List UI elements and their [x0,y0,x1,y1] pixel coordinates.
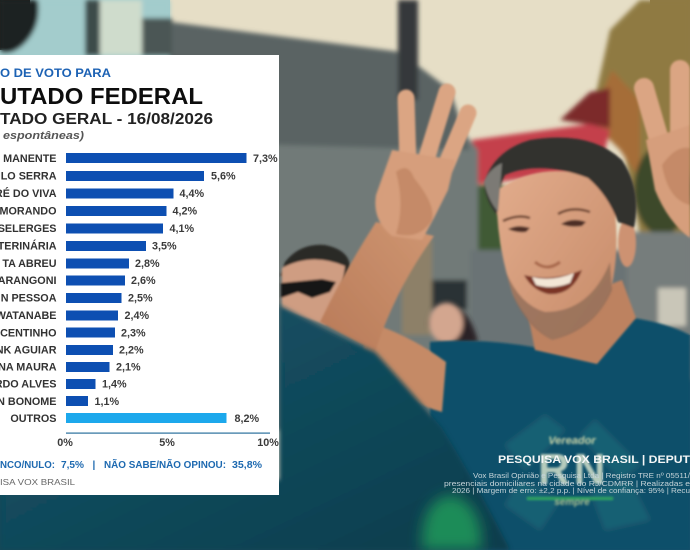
red roof and awning [472,88,610,255]
top left buildings [0,0,172,60]
stubble [506,262,612,340]
footer totals [0,458,262,471]
shirt logo lettering [538,435,610,508]
thumb fold [396,168,433,235]
values: 2,3% [121,328,146,340]
values: 4,2% [172,206,198,218]
panel: poll chart card [0,55,279,495]
man: raised left hand and arm [320,92,468,412]
card title: UTADO FEDERAL [0,83,203,109]
background person with sunglasses [280,245,350,325]
source note: ISA VOX BRASIL [0,478,76,487]
palm [375,150,455,240]
values: 2,2% [119,344,144,356]
caption heading: PESQUISA VOX BRASIL | DEPUT [498,454,690,466]
nose shadow [535,262,560,267]
candidate labels: MORANDO [0,206,56,218]
utility pole [398,0,467,335]
caption details: presenciais domiciliares na cidade do RJ/CDMRR | Realizadas e [444,479,690,488]
footer totals: | [92,460,96,471]
hair [484,138,636,228]
foreground person shoulder [0,305,510,550]
man: t-shirt [430,317,690,550]
card kicker: O DE VOTO PARA [0,66,111,80]
values: 7,3% [253,153,278,165]
x axis: 10% [257,437,279,449]
values: 4,1% [170,223,195,235]
candidate labels: CENTINHO [0,328,56,340]
fingers [406,92,468,170]
values [94,153,278,425]
ear [618,219,636,267]
values: 2,1% [116,362,141,374]
shirt logo pattern [505,415,650,530]
photo background: street scene [0,0,690,430]
values: 4,4% [180,188,205,200]
man: raised right hand [644,70,690,238]
values: 2,8% [135,258,160,270]
values: 5,6% [211,170,236,182]
candidate labels: N PESSOA [1,292,57,304]
caption details: Vox Brasil Opinião e Pesquisa Ltda | Registro TRE nº 05511/ [473,471,690,480]
values: 1,4% [102,378,127,390]
caption details: 2026 | Margem de erro: ±2,2 p.p. | Nível de confiança: 95% | Recu [452,486,690,495]
caption details [444,471,690,495]
eyes [508,226,530,232]
overlay caption [444,454,690,495]
man: head [484,138,636,340]
shirt logo lettering: sempre [554,497,590,508]
candidate labels [0,153,57,425]
footer totals: 35,8% [232,460,262,471]
tree top right [590,0,690,235]
values: 1,1% [94,396,120,408]
forearm [320,222,434,352]
values: 3,5% [152,240,177,252]
x axis [57,432,279,449]
bars [66,153,246,423]
face [497,171,617,340]
shirt logo lettering: Vereador [548,435,596,447]
values: 8,2% [234,413,260,425]
candidate labels: TA ABREU [2,258,57,270]
x axis: 5% [159,437,175,449]
upper arm [362,322,446,412]
candidate labels: MANENTE [3,153,56,165]
footer totals: NÃO SABE/NÃO OPINOU: [104,458,226,471]
values: 2,5% [128,292,153,304]
values: 2,6% [131,275,156,287]
shirt logo lettering: RN [538,445,610,494]
bar chart [0,153,279,449]
background woman [428,302,478,345]
green blurred foreground patch [422,495,482,550]
values: 2,4% [124,310,150,322]
footer totals: NCO/NULO: [0,460,55,471]
card note: espontâneas) [3,130,84,142]
eyebrows [503,217,530,221]
card subtitle: TADO GERAL - 16/08/2026 [0,111,213,128]
grey building [170,22,690,430]
man: neck [528,280,636,364]
x axis: 0% [57,437,73,449]
candidate labels: OUTROS [10,413,56,425]
footer totals: 7,5% [61,460,84,471]
smile [524,270,582,294]
